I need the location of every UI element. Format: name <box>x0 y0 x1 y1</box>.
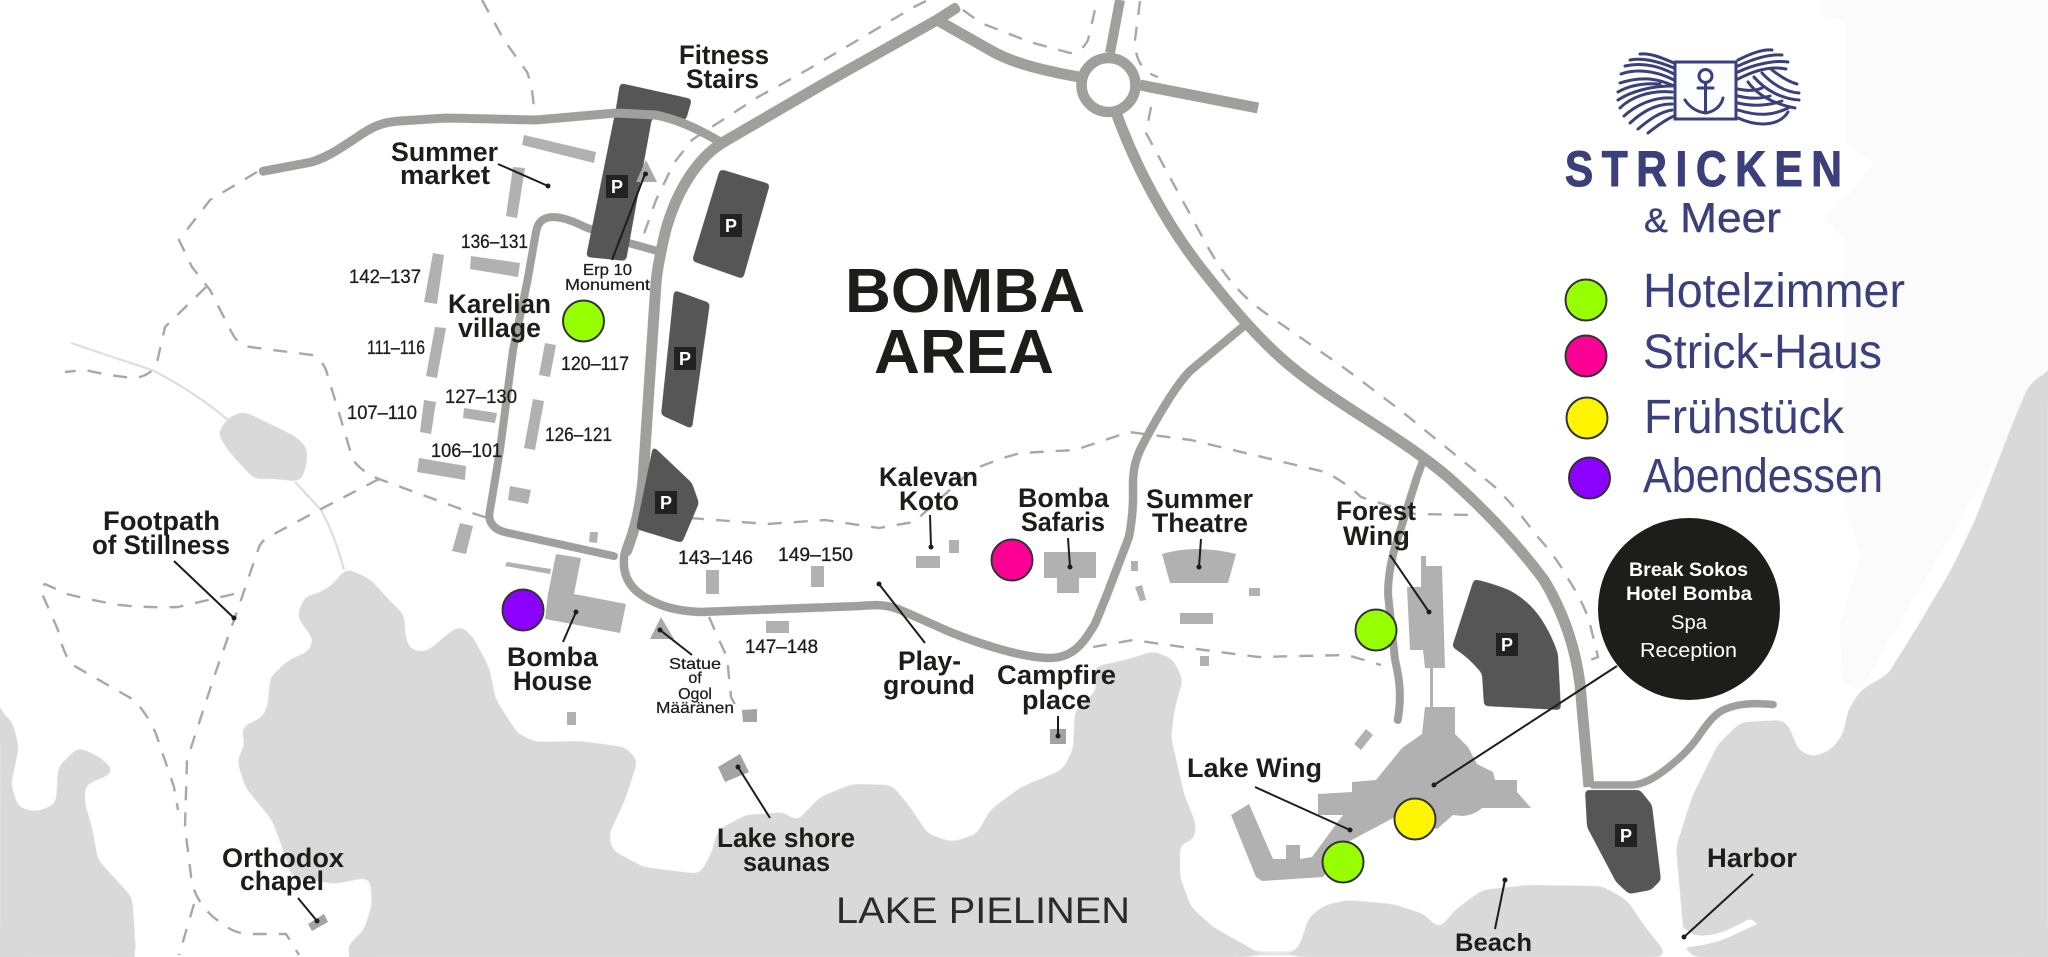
label: Karelian village: Karelian <box>448 289 551 319</box>
label: Kalevan Koto: Kalevan <box>879 462 978 492</box>
label: Summer market <box>391 137 550 190</box>
label: Erp 10 Monument: Erp 10 <box>583 262 632 279</box>
label: Footpath of Stillness: Footpath <box>103 506 220 536</box>
label: Erp 10 Monument: Monument <box>565 277 651 294</box>
label: Fitness Stairs: Fitness <box>679 40 769 70</box>
parking areas <box>636 169 1661 894</box>
cabin number labels: 127–130 <box>445 386 517 408</box>
label: Campfire place <box>997 660 1116 738</box>
label: Orthodox chapel <box>222 843 344 924</box>
label: Summer market: Summer <box>391 137 498 167</box>
building: Forest Wing <box>1407 556 1445 708</box>
cabin number labels: 136–131 <box>461 231 528 253</box>
parking labels: P <box>1501 635 1513 655</box>
label: Orthodox chapel: chapel <box>240 866 324 896</box>
parking labels: P <box>725 216 737 236</box>
cabin number labels: 147–148 <box>745 636 818 658</box>
road: lakeside road <box>624 325 1245 658</box>
label: Statue of Ogol Määränen: Ogol <box>678 686 712 703</box>
cabin number labels: 120–117 <box>561 353 629 375</box>
parking labels: P <box>1620 826 1632 846</box>
label: Kalevan Koto: Koto <box>899 486 959 516</box>
label: Statue of Ogol Määränen: Määränen <box>656 700 734 717</box>
label: Harbor: Harbor <box>1707 843 1797 873</box>
callout: Break Sokos Hotel Bomba: Break Sokos <box>1629 559 1748 581</box>
callout: Break Sokos Hotel Bomba: Hotel Bomba <box>1626 583 1752 605</box>
monuments: triangles <box>636 160 674 639</box>
label: Kalevan Koto <box>879 462 978 550</box>
label: Summer Theatre: Theatre <box>1152 508 1248 538</box>
legend item: Frühstück: Frühstück <box>1644 391 1845 444</box>
label: Fitness Stairs: Stairs <box>686 64 759 94</box>
label: Lake Wing <box>1187 753 1352 832</box>
title: Bomba Area: AREA <box>874 318 1054 387</box>
legend item: Frühstück <box>1566 391 1845 444</box>
callout: Break Sokos Hotel Bomba <box>1432 518 1780 788</box>
label: Statue of Ogol Määränen: Statue <box>669 656 721 673</box>
cabin number labels: 111–116 <box>367 337 425 359</box>
building: Break Sokos Hotel Bomba <box>1231 707 1531 881</box>
label: Karelian village: village <box>458 313 541 343</box>
small diagonal building <box>1354 729 1373 750</box>
cabin number labels: 142–137 <box>349 266 421 288</box>
building: Bomba House <box>505 554 626 725</box>
parking labels: P <box>679 349 691 369</box>
label: Playground: ground <box>883 670 975 700</box>
logo wordmark <box>1565 141 1842 241</box>
label: Summer market: market <box>400 160 490 190</box>
road: Karelian village loop <box>489 217 661 557</box>
cabin number labels: 149–150 <box>778 544 853 566</box>
roads at the roundabout <box>937 0 1258 108</box>
label: Forest Wing: Wing <box>1343 521 1410 551</box>
faint background area <box>1823 0 2048 690</box>
water: harbor inlet <box>1680 920 1757 948</box>
label: Karelian village <box>448 289 551 343</box>
label: Lake Pielinen: LAKE PIELINEN <box>836 890 1130 931</box>
label: Footpath of Stillness <box>92 506 236 620</box>
label: Footpath of Stillness: of Stillness <box>92 530 230 560</box>
water: pond <box>217 411 307 482</box>
parking area 1 <box>586 83 692 261</box>
label: Lake Wing: Lake Wing <box>1187 753 1322 783</box>
buildings: Karelian village <box>417 135 598 554</box>
logo wordmark: & Meer <box>1644 194 1781 241</box>
buildings: central area <box>706 540 1260 666</box>
label: Harbor <box>1682 843 1797 940</box>
cabin number labels <box>347 231 853 658</box>
label: Fitness Stairs <box>679 40 769 94</box>
legend item: Abendessen: Abendessen <box>1643 450 1883 503</box>
cabin number labels: 126–121 <box>545 424 612 446</box>
callout: Break Sokos Hotel Bomba: Spa <box>1671 612 1708 634</box>
legend item: Hotelzimmer: Hotelzimmer <box>1643 265 1905 318</box>
label: Forest Wing: Forest <box>1336 496 1416 526</box>
logo wordmark: STRICKEN <box>1565 141 1842 197</box>
water: west bay <box>0 705 136 957</box>
cabin number labels: 107–110 <box>347 402 417 424</box>
label: Orthodox chapel: Orthodox <box>222 843 344 873</box>
road: harbor road <box>1589 704 1777 785</box>
water: canvas corner fill <box>0 370 2048 957</box>
title: Bomba Area: BOMBA <box>845 257 1085 326</box>
map pin: dinner, Bomba House <box>502 590 544 630</box>
logo: yarn skein with anchor <box>1618 50 1799 133</box>
label: Campfire place: place <box>1022 685 1091 715</box>
cabin number labels: 143–146 <box>678 547 753 569</box>
label: Summer Theatre <box>1146 484 1253 570</box>
water: harbor and east bay <box>1676 368 2048 957</box>
callout: Break Sokos Hotel Bomba: Reception <box>1640 640 1737 662</box>
label: Lake shore saunas <box>717 764 855 877</box>
label: Bomba Safaris: Bomba <box>1018 483 1109 513</box>
label: Bomba Safaris <box>1018 483 1109 570</box>
title: Bomba Area <box>845 257 1085 387</box>
map pin: hotel room, Lake Wing <box>1322 842 1364 882</box>
road: main east road <box>1117 115 1589 787</box>
legend <box>1566 265 1905 503</box>
small shore buildings <box>308 709 1066 931</box>
label: Forest Wing <box>1336 496 1432 614</box>
label: Campfire place: Campfire <box>997 660 1116 690</box>
map pin: knitting house <box>992 540 1032 580</box>
parking labels: P <box>611 177 623 197</box>
label: Statue of Ogol Määränen <box>656 628 734 717</box>
map pin: hotel room, Karelian village <box>563 300 604 342</box>
label: Bomba House <box>507 610 598 696</box>
label: Beach: Beach <box>1455 929 1532 957</box>
legend item: Strick-Haus: Strick-Haus <box>1643 326 1882 379</box>
label: Erp 10 Monument <box>565 172 651 294</box>
parking labels: P <box>660 493 672 513</box>
dashed footpaths <box>40 0 1598 955</box>
label: Bomba House: House <box>513 666 592 696</box>
label: Playground: Play- <box>898 646 961 676</box>
label: Playground <box>876 582 975 700</box>
road: Forest Wing road <box>1388 458 1424 724</box>
map pin: breakfast <box>1394 798 1436 840</box>
label: Lake shore saunas: Lake shore <box>717 823 855 853</box>
label: Statue of Ogol Määränen: of <box>688 670 702 687</box>
cabin number labels: 106–101 <box>431 440 502 462</box>
road: main west road <box>625 6 959 555</box>
map pin: hotel room, Forest Wing <box>1356 610 1396 650</box>
water: main lake Pielinen <box>237 568 1669 957</box>
label: Lake shore saunas: saunas <box>743 847 830 877</box>
roundabout <box>1082 58 1136 112</box>
label: Beach <box>1455 878 1532 957</box>
label: Bomba House: Bomba <box>507 642 598 672</box>
label: Bomba Safaris: Safaris <box>1021 507 1105 537</box>
label: Summer Theatre: Summer <box>1146 484 1253 514</box>
streams <box>71 343 344 570</box>
road: top-left access <box>259 113 722 172</box>
parking labels <box>606 175 1637 847</box>
